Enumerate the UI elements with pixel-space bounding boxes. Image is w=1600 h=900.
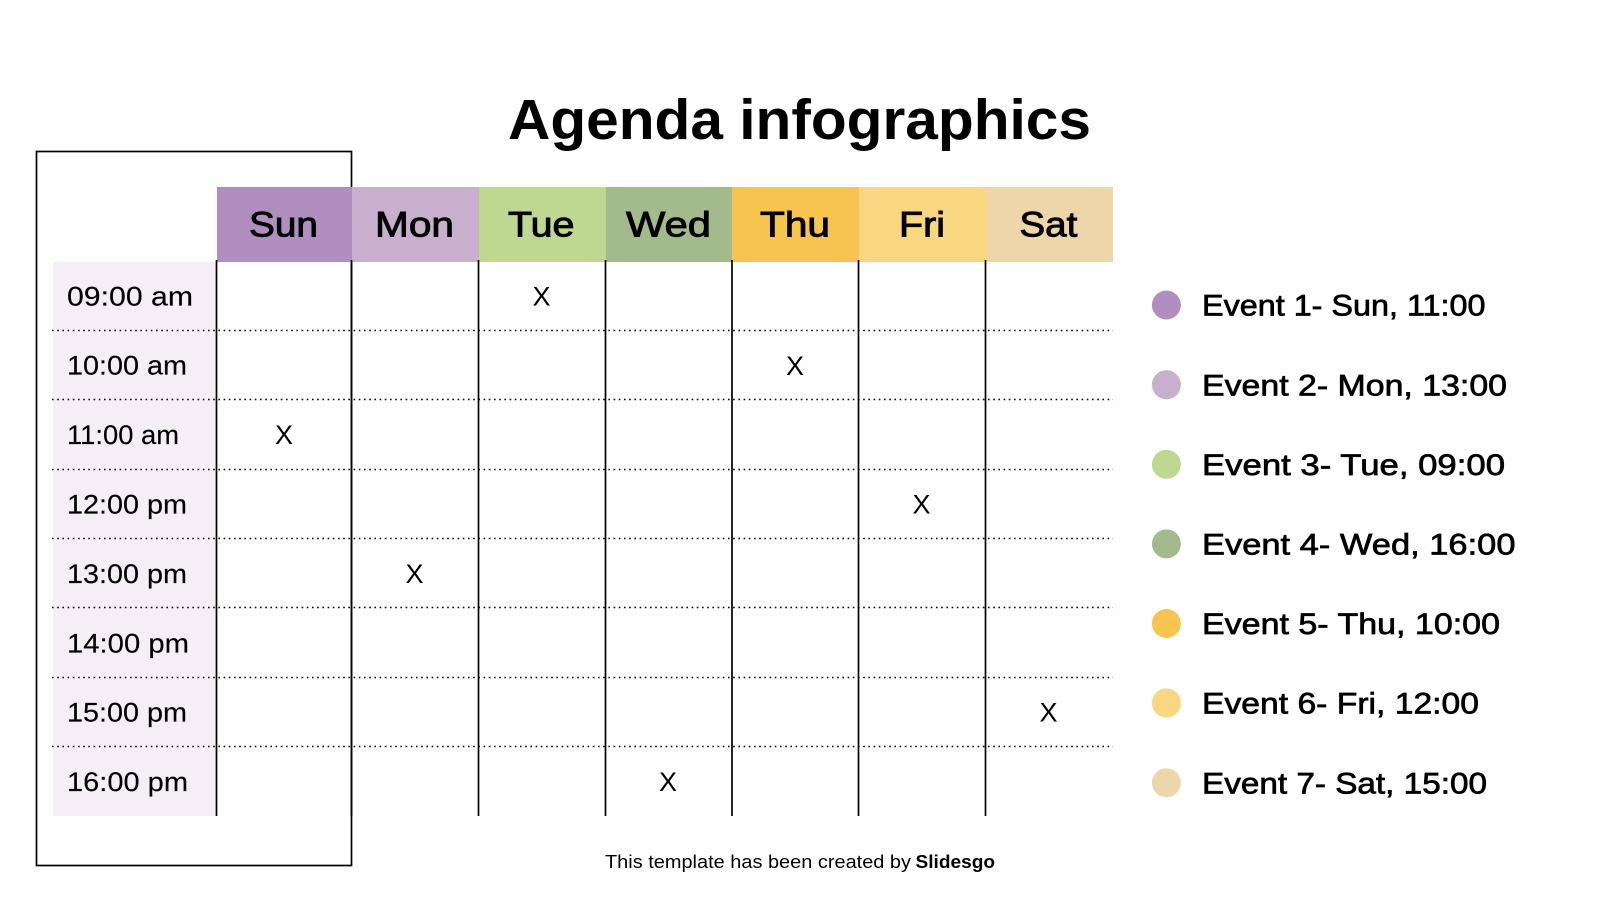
event markers: X	[786, 351, 804, 381]
header: Mon: Mon	[375, 206, 454, 245]
header: Fri: Fri	[899, 206, 945, 245]
title: Agenda infographics	[508, 88, 1091, 152]
time labels: 11:00 am	[67, 420, 179, 450]
legend item: Event 1: Event 1- Sun, 11:00	[1202, 290, 1486, 323]
event markers: X	[912, 490, 931, 520]
header: Thu: Thu	[760, 206, 830, 245]
legend item: Event 5: Event 5- Thu, 10:00	[1202, 608, 1500, 641]
header: Sat: Sat	[1019, 206, 1078, 245]
event markers: X	[1039, 698, 1058, 728]
legend item: Event 6: Event 6- Fri, 12:00	[1202, 688, 1479, 721]
header: Mon	[352, 187, 479, 262]
day headers	[217, 187, 1113, 262]
legend	[1152, 290, 1516, 800]
legend item: Event 2: Event 2- Mon, 13:00	[1202, 369, 1507, 402]
event markers: X	[405, 559, 424, 589]
legend item: Event 4: Event 4- Wed, 16:00	[1202, 529, 1516, 562]
outline box highlighting Sunday column	[36, 152, 352, 866]
header: Wed: Wed	[626, 206, 711, 245]
header: Tue	[479, 187, 606, 262]
event markers: X	[532, 282, 551, 312]
header: Fri	[859, 187, 987, 262]
time labels: 09:00 am	[67, 282, 193, 312]
time labels: 16:00 pm	[67, 767, 188, 797]
event markers: X	[659, 767, 677, 797]
time labels: 10:00 am	[67, 351, 187, 381]
event markers: X	[275, 420, 293, 450]
legend item: Event 7: Event 7- Sat, 15:00	[1202, 767, 1487, 800]
time labels	[67, 282, 193, 797]
header: Thu	[732, 187, 859, 262]
header: Sun	[217, 187, 352, 262]
header: Sun: Sun	[249, 206, 318, 245]
time labels: 14:00 pm	[67, 628, 189, 658]
footer credit: This template has been created by	[605, 852, 911, 872]
time column background	[53, 262, 216, 816]
agenda table	[52, 187, 1113, 816]
header: Wed	[606, 187, 732, 262]
time labels: 12:00 pm	[67, 490, 187, 520]
time labels: 15:00 pm	[67, 698, 187, 728]
event markers	[275, 282, 1058, 797]
header: Tue: Tue	[508, 206, 574, 245]
footer credit: Slidesgo	[916, 852, 995, 872]
legend item: Event 3: Event 3- Tue, 09:00	[1202, 449, 1505, 482]
header: Sat	[987, 187, 1113, 262]
time labels: 13:00 pm	[67, 559, 187, 589]
